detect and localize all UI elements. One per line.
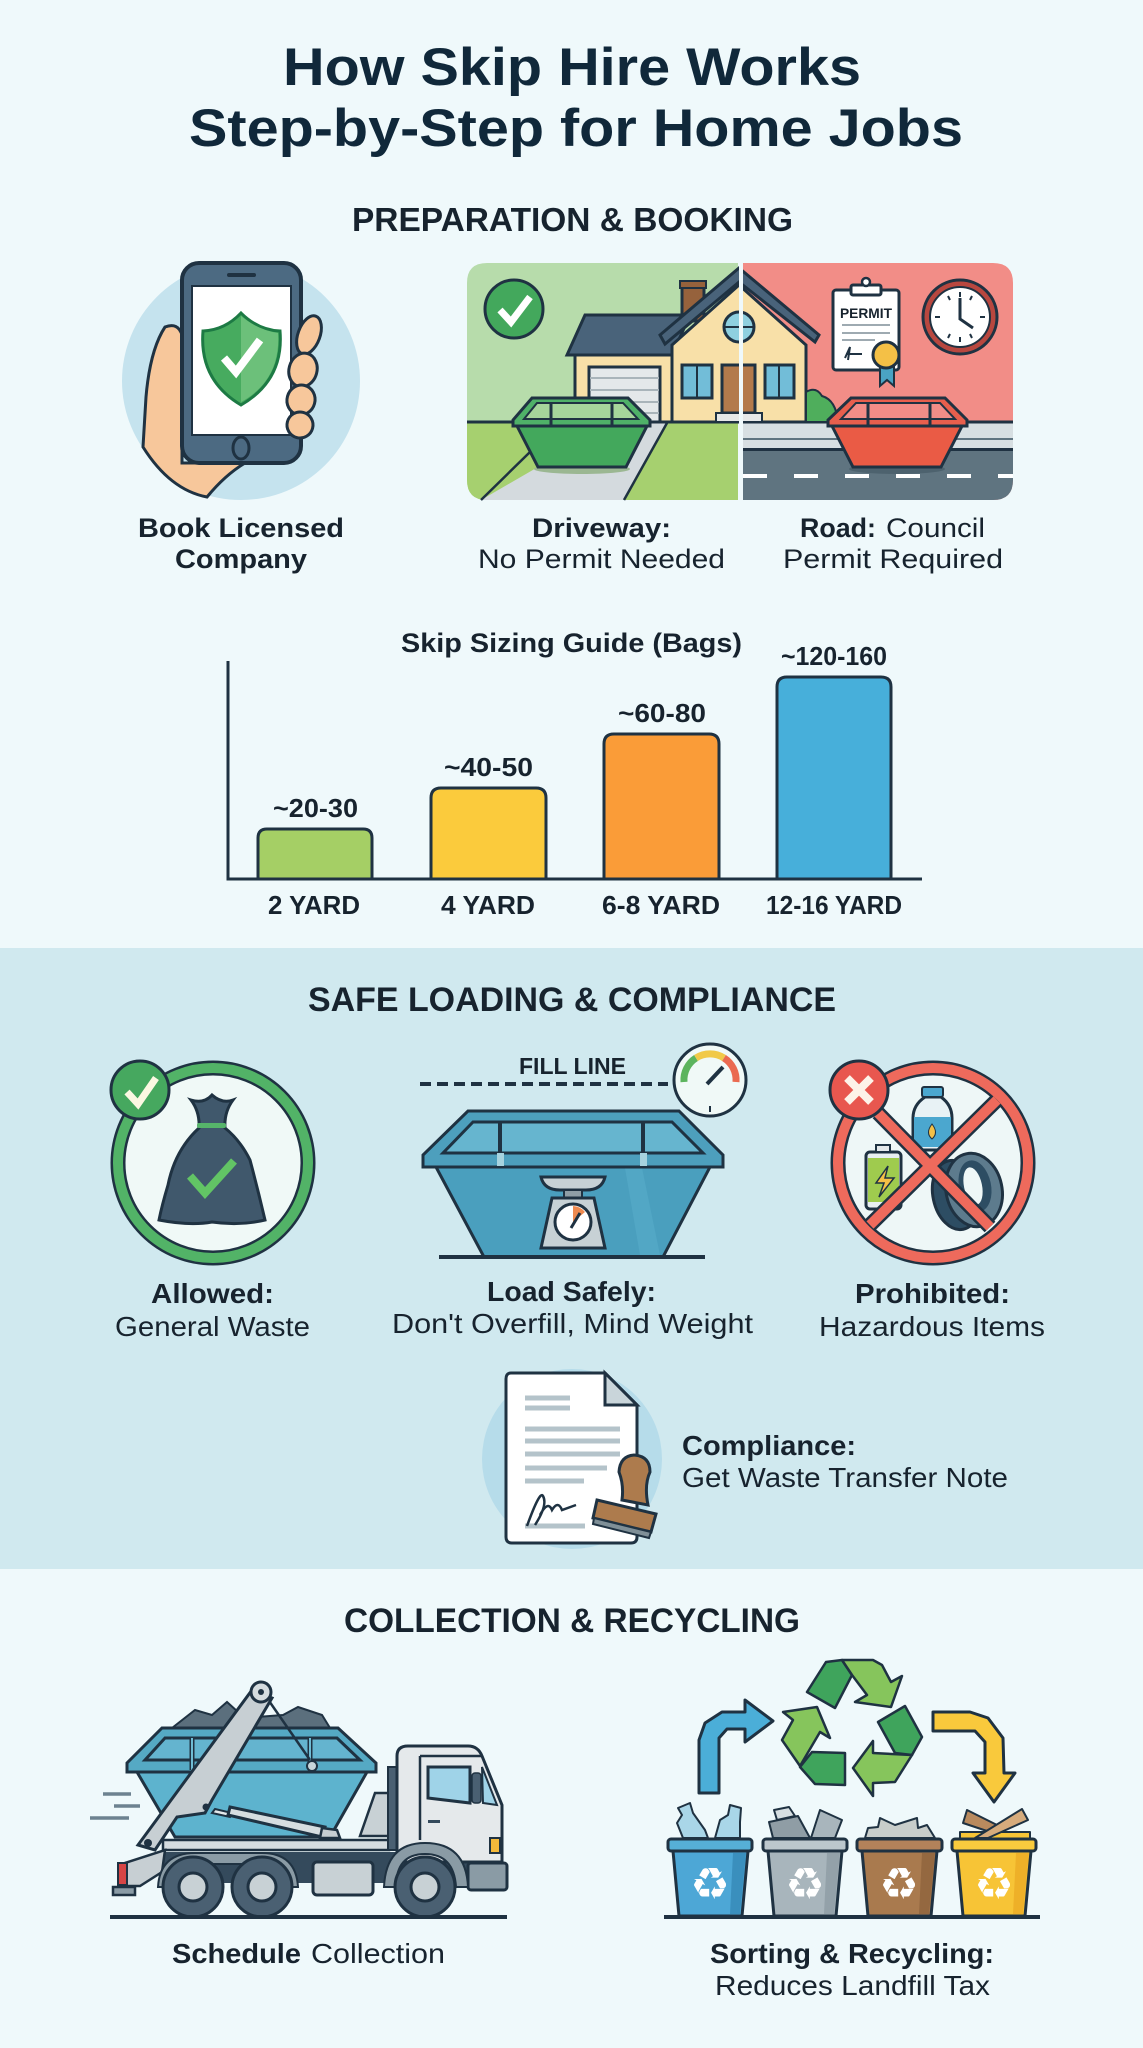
label: road: Council (886, 513, 985, 543)
fill line label: FILL LINE (519, 1053, 626, 1079)
icon: house (567, 268, 819, 422)
driveway side background (467, 263, 738, 500)
chart title: Skip Sizing Guide (Bags) (401, 628, 742, 658)
label: driveway: Driveway: (532, 513, 671, 543)
hydraulic cylinder (212, 1809, 232, 1817)
crossed lines (870, 1100, 997, 1227)
panel: driveway versus road scene (467, 263, 1013, 500)
label: book licensed company: Book Licensed (138, 513, 344, 543)
heading: safe loading and compliance: SAFE LOADING & COMPLIANCE (308, 981, 836, 1019)
bar: 4 yard (431, 788, 546, 879)
wheels (163, 1857, 223, 1917)
icon: permit clipboard: PERMIT (840, 305, 892, 321)
bin: brown: ♻ (879, 1859, 919, 1910)
bottle (913, 1097, 952, 1150)
lawn (467, 423, 738, 500)
icon: green skip (513, 398, 650, 474)
label: road (783, 513, 1003, 574)
label: road: Permit Required (783, 544, 1003, 574)
divider between driveway and road (739, 263, 743, 500)
title: Step-by-Step for Home Jobs (189, 99, 963, 158)
panel: load safely (392, 1044, 753, 1339)
heading: collection and recycling: COLLECTION & RECYCLING (344, 1602, 800, 1640)
bin: grey: ♻ (785, 1859, 825, 1910)
bar: 2 yard (258, 829, 372, 879)
label: compliance (682, 1430, 1008, 1493)
fuel tank (313, 1862, 373, 1895)
category labels: 4 YARD (441, 890, 535, 920)
category labels: 12-16 YARD (766, 890, 902, 920)
bin: brown (857, 1839, 942, 1916)
skip body (137, 1772, 367, 1837)
rear tail (125, 1850, 165, 1886)
bin: grey (763, 1839, 847, 1916)
panel: sorting and recycling (664, 1660, 1040, 2001)
value labels: ~60-80 (618, 698, 706, 728)
label: load safely: Don't Overfill, Mind Weight (392, 1308, 753, 1339)
road side background (743, 263, 1013, 500)
label: driveway (478, 513, 725, 574)
bin contents (677, 1803, 1030, 1839)
bar chart: skip sizing guide (228, 628, 922, 920)
bush (806, 390, 838, 422)
label: prohibited (819, 1278, 1045, 1342)
label: compliance: Get Waste Transfer Note (682, 1462, 1008, 1493)
panel: schedule collection (90, 1682, 507, 1969)
value labels (273, 641, 887, 823)
icon: clock (923, 280, 997, 354)
label: allowed: General Waste (115, 1311, 310, 1342)
icon: allowed bag in green ring (111, 1061, 308, 1258)
label: compliance: Compliance: (682, 1430, 856, 1461)
axes (228, 661, 922, 879)
heading: preparation and booking: PREPARATION & BOOKING (352, 201, 793, 238)
label: sorting and recycling: Reduces Landfill Tax (715, 1970, 990, 2001)
label: prohibited: Prohibited: (855, 1278, 1010, 1309)
value labels: ~40-50 (444, 752, 533, 782)
panel: allowed general waste (111, 1061, 310, 1342)
icon: red skip (828, 398, 967, 474)
label: sorting and recycling (710, 1938, 994, 2001)
icon: prohibited sign with items (830, 1061, 1028, 1258)
arrow: blue (699, 1700, 773, 1793)
category labels: 6-8 YARD (602, 890, 720, 920)
icon: waste transfer note and stamp (482, 1369, 662, 1549)
label: load safely (392, 1276, 753, 1339)
bin: yellow (952, 1839, 1036, 1916)
label: book licensed company: Company (175, 544, 307, 574)
label: road: Road: (800, 513, 876, 543)
panel: book licensed company (122, 262, 360, 574)
arrow: yellow (933, 1712, 1015, 1802)
bar: 12-16 yard (777, 677, 891, 879)
label: schedule collection (172, 1938, 445, 1969)
title: How Skip Hire Works (283, 38, 861, 97)
icon: green tick (485, 280, 543, 338)
chassis (163, 1840, 389, 1850)
label: driveway: No Permit Needed (478, 544, 725, 574)
pavement and road (743, 423, 1013, 500)
label: load safely: Load Safely: (487, 1276, 656, 1307)
panel: prohibited hazardous items (819, 1061, 1045, 1342)
bin: blue: ♻ (690, 1859, 730, 1910)
bin: blue (668, 1839, 752, 1916)
wheel arches (158, 1853, 298, 1887)
cab (360, 1793, 390, 1836)
icon: permit clipboard (833, 278, 899, 386)
icon: skip with scale (423, 1111, 723, 1257)
tyre (926, 1156, 986, 1234)
label: prohibited: Hazardous Items (819, 1311, 1045, 1342)
value labels: ~20-30 (273, 793, 358, 823)
title (189, 38, 963, 158)
driveway path (481, 423, 667, 500)
category labels (268, 890, 902, 920)
value labels: ~120-160 (781, 641, 887, 671)
icon: skip truck (90, 1682, 507, 1917)
bar: 6-8 yard (604, 734, 719, 879)
fill line (420, 1082, 668, 1086)
panel: compliance (482, 1369, 1008, 1549)
icon: recycling symbol (782, 1660, 922, 1796)
label: sorting and recycling: Sorting & Recycling: (710, 1938, 994, 1969)
label: allowed: Allowed: (151, 1278, 274, 1309)
label: book licensed company (138, 513, 344, 574)
battery (866, 1152, 901, 1209)
debris load (172, 1702, 330, 1728)
icon: phone in hand with shield (122, 262, 360, 500)
label: schedule collection: Schedule (172, 1938, 301, 1969)
label: schedule collection: Collection (311, 1938, 445, 1969)
category labels: 2 YARD (268, 890, 360, 920)
lifting arm (138, 1690, 272, 1850)
ground line (664, 1915, 1040, 1919)
icon: gauge (674, 1044, 746, 1116)
label: allowed (115, 1278, 310, 1342)
bin: yellow: ♻ (974, 1859, 1014, 1910)
